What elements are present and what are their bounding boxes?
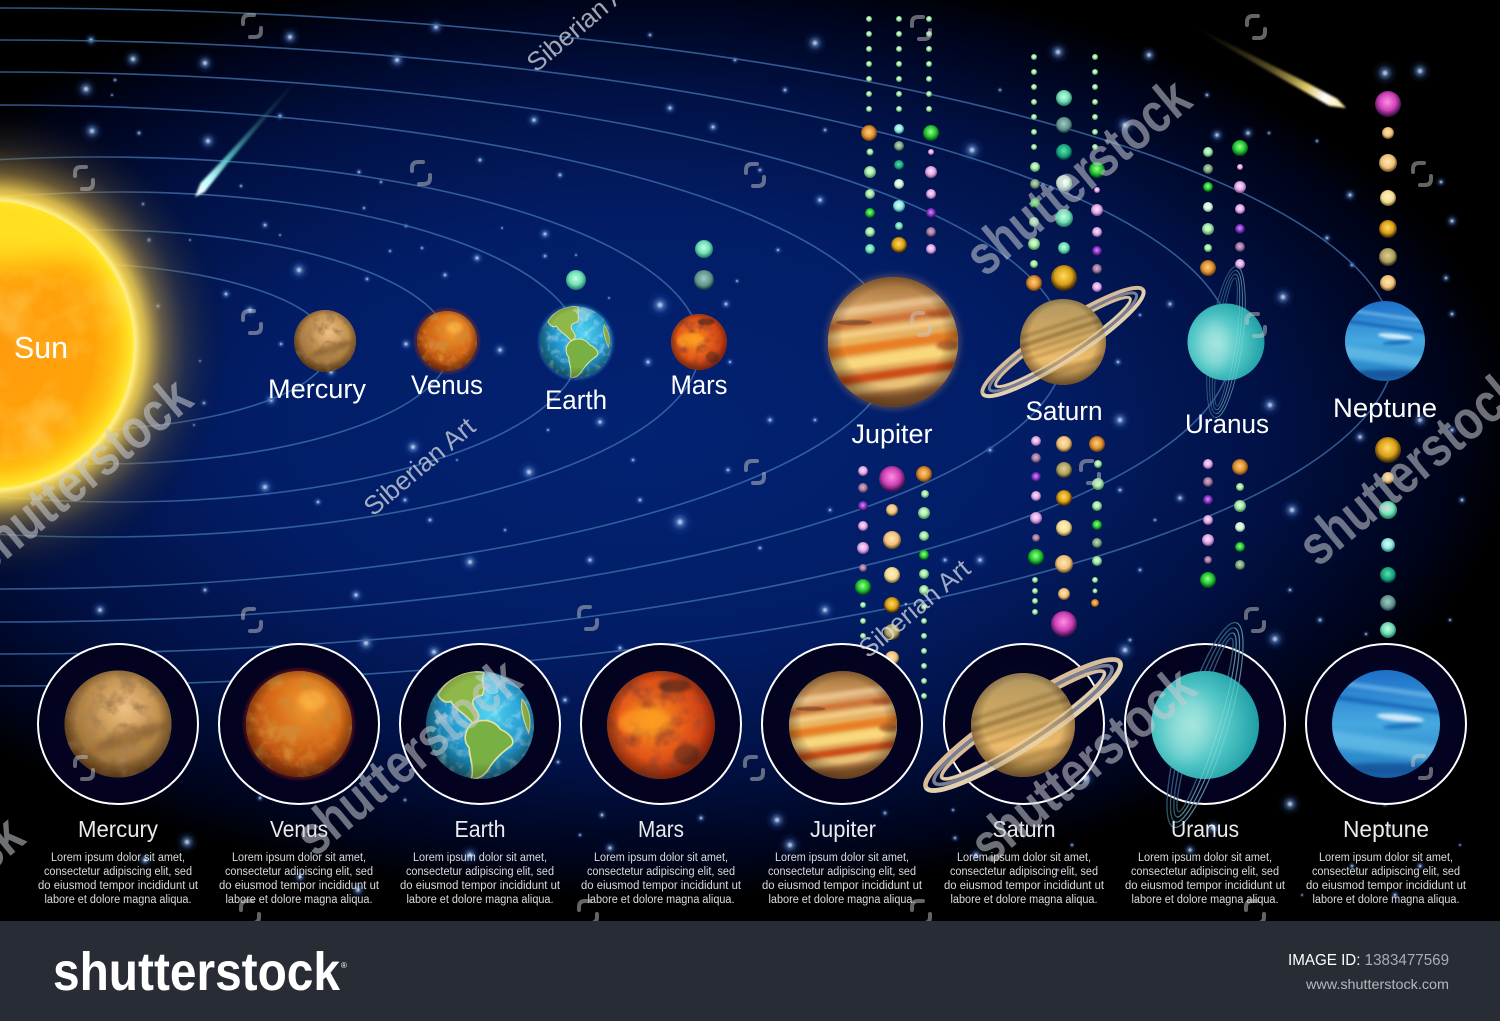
medallion: Saturn (944, 644, 1104, 804)
registered mark: ® (341, 961, 347, 970)
planet: Uranus (1185, 264, 1269, 439)
watermark: shutterstock and Siberian Art text: Siberian Art (358, 411, 482, 522)
label: Mars: Mars (670, 370, 728, 400)
medallion: Earth (400, 644, 560, 804)
description: Venus: consectetur adipiscing elit, sed (225, 866, 373, 878)
label: Saturn: Saturn (1026, 396, 1102, 426)
moons column group: Saturn bottom (1028, 436, 1105, 637)
panel: Venus card (219, 644, 380, 906)
moons of Mars and Earth (566, 240, 714, 290)
name: Uranus: Uranus (1171, 816, 1239, 842)
comet: right gold (1193, 25, 1348, 113)
description: Mercury: labore et dolore magna aliqua. (44, 894, 192, 906)
description: Mars: do eiusmod tempor incididunt ut (581, 880, 742, 892)
footer logo: shutterstock (53, 942, 341, 1002)
label: Jupiter: Jupiter (852, 419, 933, 449)
description: Mars: consectetur adipiscing elit, sed (587, 866, 735, 878)
name: Venus: Venus (270, 816, 328, 842)
description: Earth: labore et dolore magna aliqua. (406, 894, 554, 906)
large planet: Venus (243, 668, 355, 780)
description: Mercury: Lorem ipsum dolor sit amet, (51, 852, 185, 864)
watermark: shutterstock and Siberian Art text: shutterstock (957, 653, 1208, 875)
medallion: Mercury (38, 644, 198, 804)
planet: Mercury (268, 310, 366, 404)
description: Uranus: Lorem ipsum dolor sit amet, (1138, 852, 1272, 864)
description: Uranus: do eiusmod tempor incididunt ut (1125, 880, 1286, 892)
moons column group: Uranus top (1200, 140, 1248, 276)
footer bar (0, 921, 1500, 1021)
description: Saturn (944, 852, 1105, 906)
description: Jupiter: do eiusmod tempor incididunt ut (762, 880, 923, 892)
large planet: Mercury (64, 670, 172, 778)
planet: Neptune (1333, 301, 1437, 423)
planet: Jupiter (810, 274, 979, 449)
moons column group: Jupiter top (861, 16, 939, 254)
medallion: Neptune (1306, 644, 1466, 804)
label: Mercury: Mercury (268, 374, 366, 404)
description: Earth (400, 852, 561, 906)
label: Neptune: Neptune (1333, 393, 1437, 423)
name: Saturn: Saturn (992, 816, 1056, 842)
description: Neptune: do eiusmod tempor incididunt ut (1306, 880, 1467, 892)
description: Jupiter: labore et dolore magna aliqua. (768, 894, 916, 906)
large planet: Mars (607, 671, 715, 779)
label: Venus: Venus (411, 370, 483, 400)
watermark: shutterstock and Siberian Art text: Siberian Art (853, 553, 977, 664)
description: Uranus: labore et dolore magna aliqua. (1132, 894, 1278, 906)
moons column group: Jupiter bottom (855, 466, 932, 699)
name: Jupiter: Jupiter (810, 816, 876, 842)
panel: Mercury card (38, 644, 199, 906)
description: Uranus (1125, 852, 1286, 906)
label: Earth: Earth (545, 385, 607, 415)
moons column group: Neptune bottom (1375, 437, 1401, 638)
description: Neptune: consectetur adipiscing elit, sed (1312, 866, 1460, 878)
sun glow (0, 105, 230, 585)
description: Saturn: labore et dolore magna aliqua. (950, 894, 1098, 906)
image id: IMAGE ID: 1383477569 (1288, 952, 1449, 969)
description: Venus (219, 852, 380, 906)
name: Neptune: Neptune (1343, 816, 1429, 842)
description: Mercury: consectetur adipiscing elit, sed (44, 866, 192, 878)
large planet: Jupiter (774, 671, 914, 783)
description: Mars: labore et dolore magna aliqua. (588, 894, 734, 906)
description: Jupiter (762, 852, 923, 906)
large planet: Neptune (1318, 670, 1455, 778)
moons column group: Neptune top (1375, 91, 1401, 291)
description: Uranus: consectetur adipiscing elit, sed (1131, 866, 1279, 878)
panel: Jupiter card (762, 644, 923, 906)
moons column group: Uranus bottom (1200, 459, 1248, 588)
moons column group: Saturn top (1026, 54, 1105, 292)
description: Earth: Lorem ipsum dolor sit amet, (413, 852, 547, 864)
panel: Mars card (581, 644, 742, 906)
orbit lines (0, 8, 1395, 686)
panel: Saturn card (914, 644, 1132, 906)
medallion: Jupiter (762, 644, 922, 804)
description: Saturn: do eiusmod tempor incididunt ut (944, 880, 1105, 892)
sun label: Sun (14, 330, 68, 365)
medallion: Uranus (1125, 644, 1285, 804)
label: Uranus: Uranus (1185, 409, 1269, 439)
description: Neptune: Lorem ipsum dolor sit amet, (1319, 852, 1453, 864)
description: Mars (581, 852, 742, 906)
planet: Earth (538, 304, 614, 415)
planet: Saturn (973, 275, 1153, 426)
sun disc (0, 198, 137, 492)
description: Saturn: Lorem ipsum dolor sit amet, (957, 852, 1091, 864)
description: Venus: labore et dolore magna aliqua. (226, 894, 372, 906)
description: Neptune: labore et dolore magna aliqua. (1312, 894, 1460, 906)
planet: Venus (411, 308, 483, 400)
panel: Uranus card (1125, 609, 1286, 906)
description: Mars: Lorem ipsum dolor sit amet, (594, 852, 728, 864)
panel: Neptune card (1306, 644, 1467, 906)
sun (0, 126, 210, 564)
website: www.shutterstock.com (1305, 976, 1449, 992)
description: Mercury: do eiusmod tempor incididunt ut (38, 880, 199, 892)
watermark: shutterstock and Siberian Art text: shutterstock (282, 645, 533, 867)
description: Jupiter: consectetur adipiscing elit, sed (768, 866, 916, 878)
description: Earth: do eiusmod tempor incididunt ut (400, 880, 561, 892)
name: Earth: Earth (454, 816, 506, 842)
description: Saturn: consectetur adipiscing elit, sed (950, 866, 1098, 878)
watermark: shutterstock and Siberian Art text: shutterstock (952, 65, 1203, 287)
description: Neptune (1306, 852, 1467, 906)
description: Jupiter: Lorem ipsum dolor sit amet, (775, 852, 909, 864)
panel: Earth card (400, 644, 561, 906)
planet: Mars (670, 314, 728, 400)
medallion: Mars (581, 644, 741, 804)
description: Earth: consectetur adipiscing elit, sed (406, 866, 554, 878)
large planet: Uranus (1135, 609, 1275, 841)
name: Mercury: Mercury (78, 816, 158, 842)
description: Mercury (38, 852, 199, 906)
medallion: Venus (219, 644, 379, 804)
comet: left teal (191, 73, 303, 200)
name: Mars: Mars (638, 816, 684, 842)
description: Venus: do eiusmod tempor incididunt ut (219, 880, 380, 892)
large planet: Saturn (914, 644, 1132, 806)
large planet: Earth (426, 671, 534, 779)
description: Venus: Lorem ipsum dolor sit amet, (232, 852, 366, 864)
